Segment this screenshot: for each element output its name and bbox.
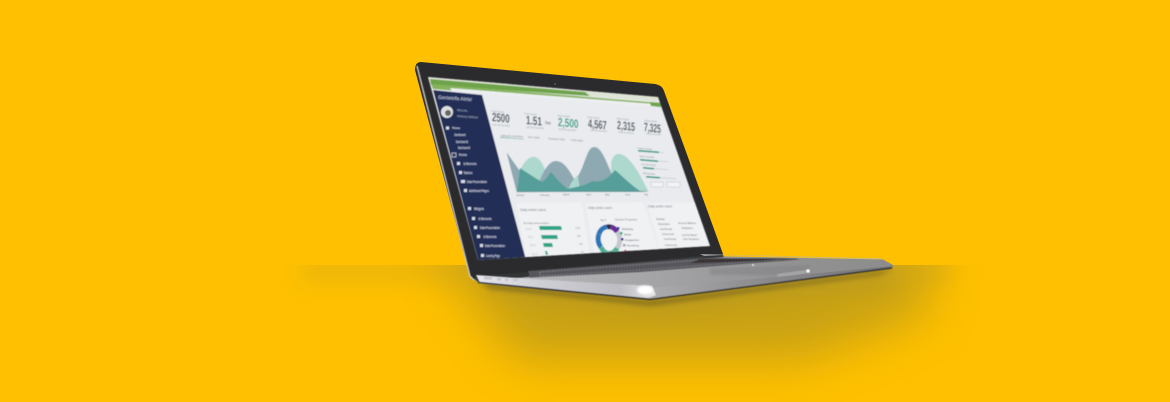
card: daily active users 3: Subscription (658, 223, 671, 226)
navigation menu: UI Elements (464, 162, 477, 166)
chart progress bars: Bill boards (643, 172, 656, 176)
card: daily active users 3: Achievements (665, 244, 678, 247)
chart axis labels: February (540, 194, 550, 197)
card: daily active users 1 (520, 208, 590, 258)
navigation menu: Dashboard2 (456, 140, 468, 144)
card: daily active users 3: Auto Renewal (664, 238, 676, 241)
card: daily active users 1: 23k (579, 243, 584, 246)
top stats row (492, 112, 662, 134)
navigation icons (446, 126, 484, 257)
hero illustration: laptop on yellow background (302, 62, 960, 384)
donut legend: Engagement (625, 238, 639, 242)
top stats row: 7,325 (644, 121, 661, 137)
stats captions: 10% From last Week (590, 128, 608, 133)
stats captions: 10% From last Week (526, 125, 545, 130)
card: daily active users 1: 0.1.3 (532, 253, 538, 256)
stats captions: Total Users (587, 115, 601, 120)
chart axis labels: April (586, 194, 591, 196)
trackpad reflection (710, 265, 810, 275)
donut legend: Marketing (622, 227, 634, 231)
chart axis labels: July (644, 194, 649, 196)
navigation menu: UI Elements (484, 235, 497, 239)
card: daily active users 3: Achievements (662, 233, 675, 236)
laptop lid bezel (415, 62, 723, 283)
card: daily active users 1: 0.1.2 (530, 244, 536, 247)
top stats row: 2,315 (617, 119, 635, 135)
stats captions: 10% From last Week (492, 123, 511, 128)
ports (484, 276, 518, 281)
stats captions: Total Users (644, 119, 658, 123)
front corner glare (637, 286, 653, 294)
profile avatar (441, 106, 453, 118)
top stats row: 1.51 (526, 115, 542, 129)
navigation menu: Landing Page (486, 254, 500, 258)
chart axis labels: March (563, 194, 570, 196)
browser chrome (428, 77, 663, 107)
card: daily active users 3: Daily active users (648, 204, 672, 208)
stats captions: Total Users (616, 117, 630, 121)
chart tabs (500, 134, 584, 142)
chart axis labels (516, 194, 649, 197)
chart axis labels: June (625, 194, 631, 196)
front edge right facet (650, 266, 893, 299)
stats captions: 10% From last Week (558, 127, 577, 132)
card: daily active users 2: Daily active users (588, 206, 612, 210)
top stats row: Sec (545, 120, 551, 126)
card: daily active users 3 (647, 202, 712, 252)
profile name: Welcome, (457, 108, 468, 113)
top stats row: 4,567 (588, 118, 607, 133)
card: daily active users 2: Device Progress (615, 218, 638, 222)
card: daily active users 3: Auto Renewal (660, 228, 672, 231)
card: daily active users 1: 0.1.0 (526, 228, 532, 231)
navigation menu: Dashboard (454, 133, 466, 137)
navigation menu (452, 126, 505, 258)
stats captions: Total Users (491, 109, 505, 114)
navigation menu: UI Elements (478, 217, 492, 221)
brand name: Gentelella Alela! (438, 95, 472, 103)
bottom edge (478, 268, 892, 300)
profile name: Anthony Melhart (457, 114, 478, 119)
profile name (457, 108, 478, 119)
chart progress bars: Conventional Media (641, 163, 657, 167)
navigation menu: Data Presentation (467, 180, 487, 184)
donut chart (598, 227, 620, 253)
navigation menu: Home (452, 126, 460, 130)
sidebar (433, 90, 526, 260)
navigation menu: Forms (459, 153, 467, 157)
card: daily active users 1: 0.1.1 (528, 236, 534, 239)
dashboard screen (428, 77, 712, 260)
donut legend (617, 227, 640, 254)
stats captions: 10% From last Week (646, 132, 662, 137)
chart buttons (651, 182, 680, 187)
chart axis labels: May (605, 194, 610, 196)
navigation menu: Widgets (474, 207, 484, 211)
stats captions (491, 109, 662, 137)
card: daily active users 3: View Transaction (683, 238, 700, 241)
card: daily active users 1: 123k (575, 227, 581, 230)
navigation menu: Dashboard3 (458, 146, 470, 150)
card: daily active users 1: 3k (581, 251, 584, 254)
laptop (415, 62, 893, 306)
top stats row: 2,500 (558, 117, 579, 132)
stats captions: 10% From last Week (618, 130, 635, 135)
chart tabs: Transaction Sales (548, 137, 566, 141)
card: daily active users 2: Top 5 (600, 218, 607, 222)
navigation menu: Additional Pages (469, 189, 489, 193)
stats captions: Total Users (557, 114, 571, 118)
hinge band (472, 254, 724, 282)
chart tabs: Profit Sales (571, 138, 584, 143)
table shadow (300, 240, 950, 360)
donut legend: Media (624, 232, 632, 236)
chart tabs: Network Activities (501, 134, 524, 139)
card: daily active users 3: Account Balance (678, 222, 697, 225)
keyboard (528, 258, 800, 278)
navigation menu: Data Presentation (485, 244, 505, 248)
stats captions: Total Users (524, 112, 538, 116)
chart progress bars: Facebook Campaign (637, 147, 653, 151)
top stats row: 2500 (492, 112, 510, 126)
front edge left highlight (476, 275, 656, 298)
chart progress bars (637, 147, 676, 180)
card: daily active users 3: Get Full Report (682, 234, 697, 237)
navigation menu: Tables (464, 171, 473, 175)
card: daily active users 1: Daily active users (520, 208, 546, 212)
chart tabs: Item Sales (528, 135, 541, 140)
laptop base top deck (473, 256, 893, 299)
card: daily active users 1: Top Usage across sessions (523, 221, 550, 225)
donut legend: Remaining (627, 244, 640, 248)
laptop contact shadow (480, 270, 893, 306)
card: daily active users 1: 53k (577, 235, 582, 238)
card: daily active users 3: Settings (656, 218, 665, 221)
donut legend: Other (628, 250, 635, 254)
chart progress bars: Twitter Campaign (639, 155, 655, 159)
chart axis labels: January (516, 194, 525, 197)
card: daily active users 3: Breakdown (682, 227, 694, 230)
card: daily active users 2 (588, 206, 658, 254)
status light (806, 269, 810, 273)
navigation menu: Data Presentation (480, 226, 500, 230)
area chart (507, 147, 648, 192)
